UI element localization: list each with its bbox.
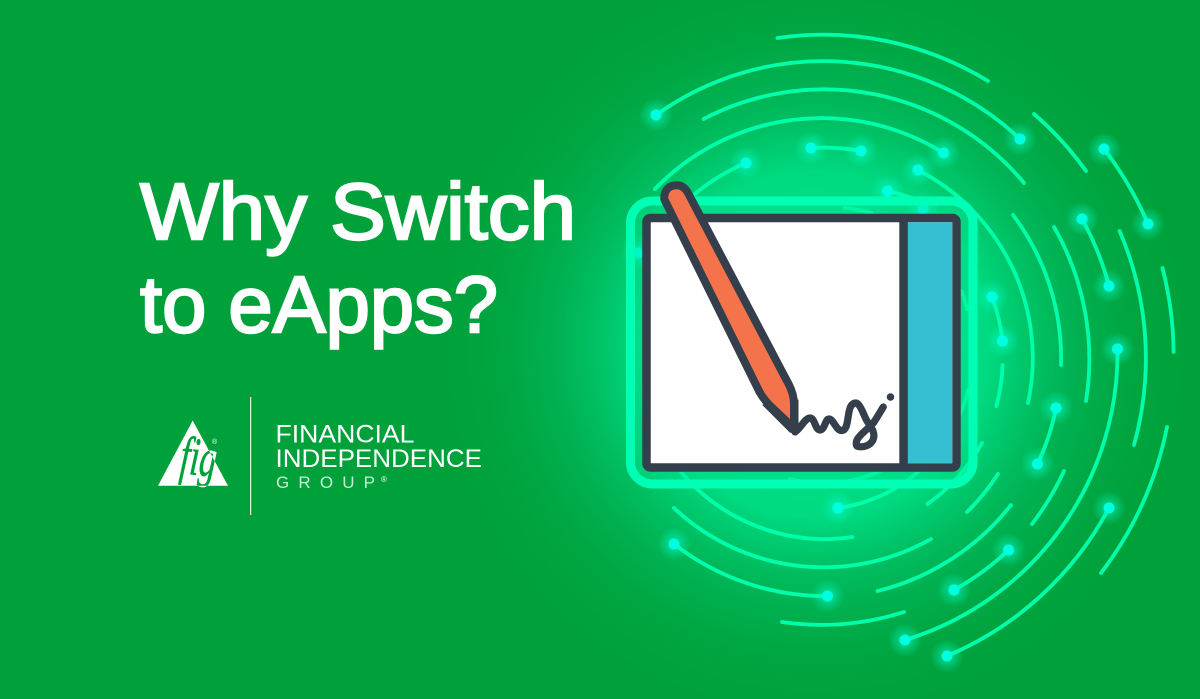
logo triangle mark: ® [212, 438, 218, 446]
tablet glow frame [630, 201, 973, 484]
logo triangle mark [158, 420, 228, 489]
tablet blue side panel [904, 222, 952, 463]
glowing node dots [621, 98, 1165, 673]
registered mark: ® [381, 475, 387, 484]
title line 2: to eApps? [140, 260, 498, 349]
signature tablet icon [630, 189, 973, 484]
tablet paper area [646, 218, 956, 468]
logo triangle mark: fig [178, 425, 220, 489]
logo divider [250, 397, 251, 515]
logo: Financial Independence Group [158, 397, 482, 515]
title line 1: Why Switch [140, 167, 576, 256]
pen [668, 189, 798, 434]
tablet divider [899, 218, 908, 467]
title [140, 167, 576, 349]
signature [795, 393, 894, 447]
logo wordmark line 3: GROUP [276, 473, 375, 492]
logo wordmark line 1: FINANCIAL [276, 421, 415, 449]
central glow [400, 0, 1200, 699]
logo wordmark line 2: INDEPENDENCE [276, 445, 482, 473]
concentric signal arcs [655, 35, 1174, 656]
logo triangle mark: fig [178, 425, 220, 489]
